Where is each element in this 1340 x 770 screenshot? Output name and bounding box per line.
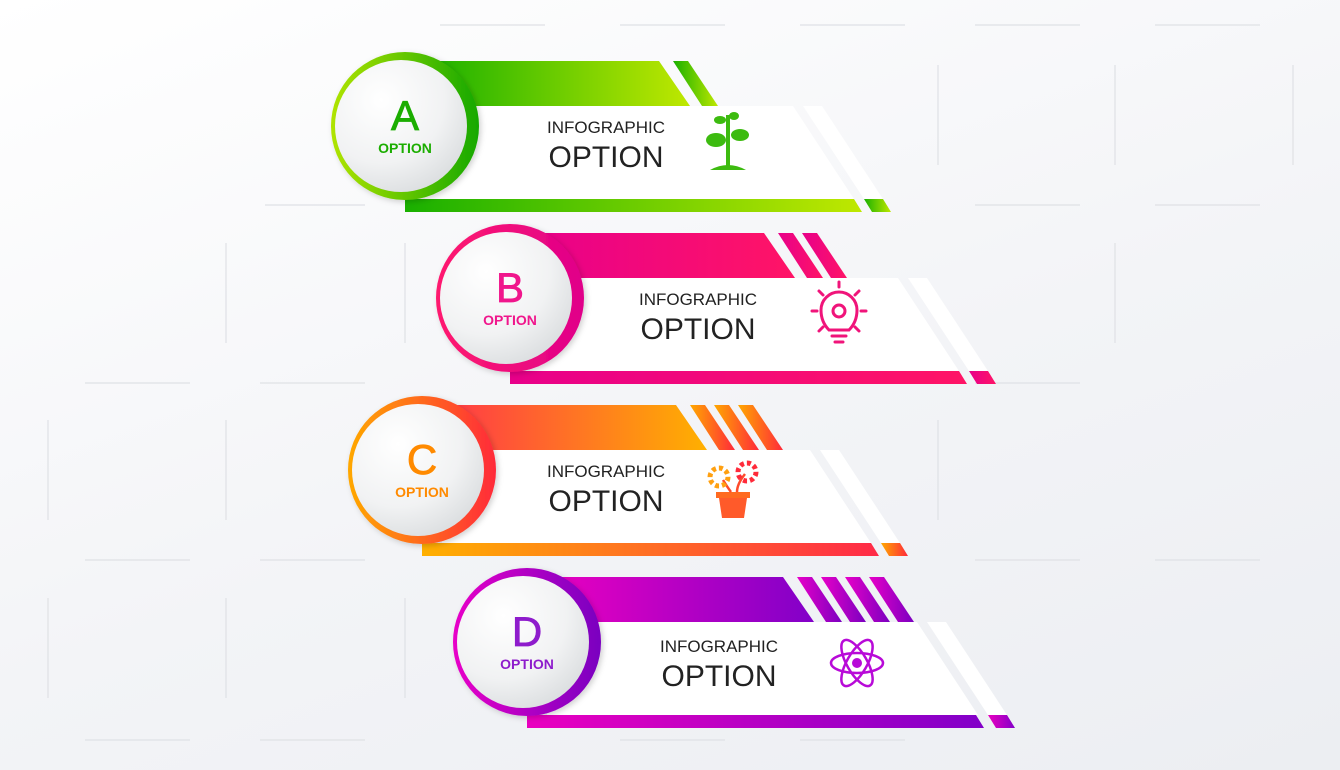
icon: plant (706, 112, 749, 170)
text C: INFOGRAPHIC (547, 462, 665, 481)
text D: OPTION (661, 660, 777, 693)
text A: INFOGRAPHIC (547, 118, 665, 137)
circle A (331, 52, 479, 200)
row A (331, 52, 891, 212)
circle A: OPTION (378, 140, 432, 156)
circle B (436, 224, 584, 372)
text B: OPTION (640, 313, 756, 346)
text D (660, 637, 778, 693)
text A: OPTION (548, 141, 664, 174)
row D (453, 568, 1015, 728)
circle B: B (496, 264, 524, 311)
circle D: OPTION (500, 656, 554, 672)
text C: OPTION (548, 485, 664, 518)
icon: atom (831, 635, 883, 691)
circle D: D (512, 608, 542, 655)
row B (436, 224, 996, 384)
circle C: OPTION (395, 484, 449, 500)
circle D (453, 568, 601, 716)
circle C: C (407, 436, 437, 483)
text B: INFOGRAPHIC (639, 290, 757, 309)
text D: INFOGRAPHIC (660, 637, 778, 656)
row C (348, 396, 908, 556)
circle C (348, 396, 496, 544)
text C (547, 462, 665, 518)
text B (639, 290, 757, 346)
icon: bulb (812, 282, 866, 342)
circle A: A (391, 92, 419, 139)
text A (547, 118, 665, 174)
icon: flower pot (710, 463, 756, 518)
circle B: OPTION (483, 312, 537, 328)
